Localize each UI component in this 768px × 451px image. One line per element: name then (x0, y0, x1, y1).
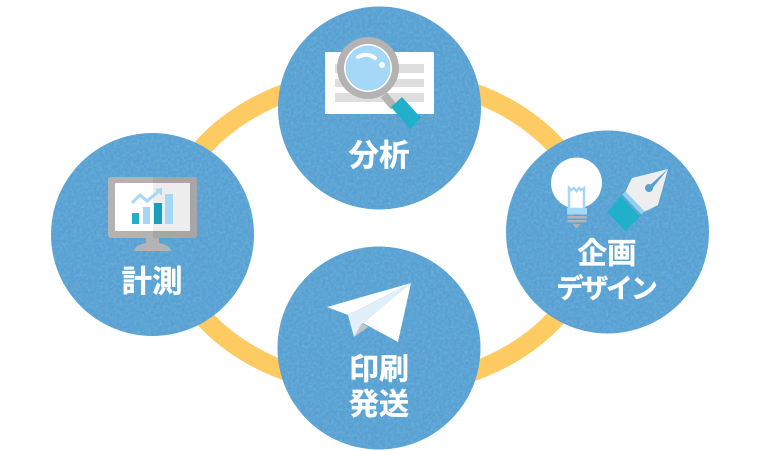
label: 印刷発送: 印刷 (349, 354, 409, 386)
icon: paper airplane (327, 283, 411, 342)
label: 計測: 計測 (122, 265, 182, 299)
label: 企画デザイン: 企画 (577, 238, 637, 270)
panel: 企画デザイン (506, 130, 709, 334)
icon: monitor with chart (108, 177, 197, 251)
label: 分析: 分析 (348, 139, 410, 173)
panel: 企画デザイン: デザイン (556, 273, 657, 304)
panel: 分析 (278, 6, 481, 210)
panel: 印刷発送 (278, 246, 480, 450)
panel: 印刷発送: 発送 (349, 388, 409, 422)
icon: fountain pen nib (607, 169, 668, 231)
icon: light bulb (551, 158, 602, 228)
icon: document with magnifier (325, 37, 434, 129)
panel: 計測 (51, 133, 254, 336)
yellow cycle ring (169, 76, 591, 388)
